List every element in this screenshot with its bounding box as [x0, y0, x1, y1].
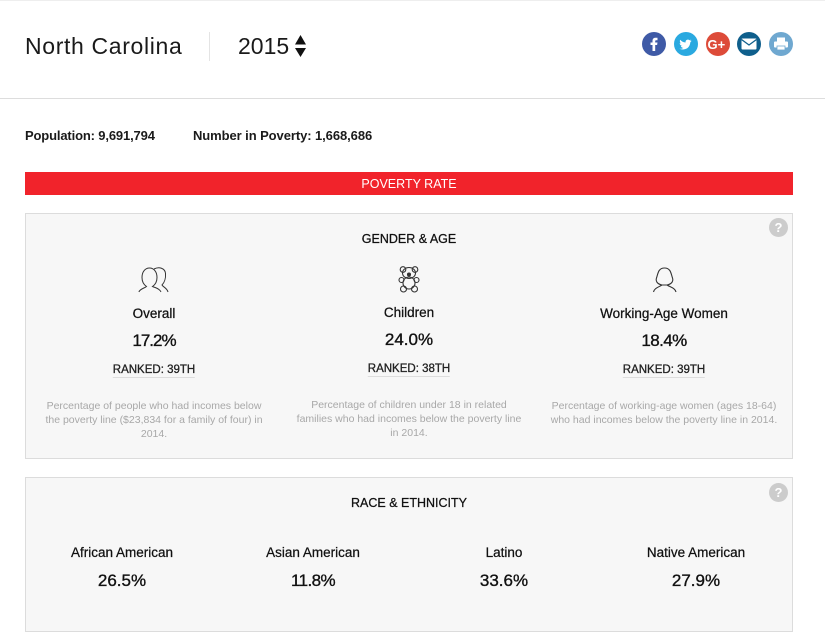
- icon: sort arrows: [295, 35, 306, 57]
- value: children: 24.0%: [385, 330, 433, 349]
- banner: poverty rate: [25, 172, 793, 195]
- icon: google plus: G+: [708, 37, 726, 52]
- icon: facebook: [642, 32, 666, 56]
- year: 2015: [238, 33, 289, 59]
- rank: children: RANKED: 38TH: [368, 363, 450, 375]
- description: children: [296, 399, 521, 439]
- description: overall: the poverty line ($23,834 for a family of four) in: [45, 414, 263, 426]
- description: working-age women: [550, 400, 777, 426]
- label: latino: Latino: [486, 545, 522, 560]
- description: overall: 2014.: [141, 428, 167, 440]
- description: overall: [45, 400, 263, 440]
- heading: RACE & ETHNICITY: [351, 496, 467, 510]
- label: asian american: Asian American: [266, 545, 360, 560]
- population: Population: 9,691,794: [25, 128, 155, 143]
- icon: help: [769, 483, 788, 502]
- label: native american: Native American: [647, 545, 745, 560]
- icon: help: ?: [775, 220, 782, 235]
- description: working-age women: Percentage of working-age women (ages 18-64): [552, 400, 776, 412]
- share icons: [642, 32, 793, 56]
- description: children: families who had incomes below the poverty line: [297, 413, 521, 425]
- value: african american: 26.5%: [98, 571, 146, 590]
- description: overall: Percentage of people who had incomes below: [47, 400, 261, 412]
- value: latino: 33.6%: [480, 571, 528, 590]
- value: native american: 27.9%: [672, 571, 720, 590]
- icon: two people: [138, 267, 168, 292]
- state name: North Carolina: [25, 33, 182, 59]
- rank: working-age women: RANKED: 39TH: [623, 364, 705, 376]
- icon: twitter: [674, 32, 698, 56]
- top rule: [0, 0, 825, 1]
- label: african american: African American: [71, 545, 173, 560]
- icon: help: [769, 218, 788, 237]
- icon: print: [769, 32, 793, 56]
- label: working-age women: Working-Age Women: [600, 306, 728, 321]
- description: working-age women: who had incomes below the poverty line in 2014.: [551, 414, 777, 426]
- icon: google plus: [706, 32, 730, 56]
- panel: race & ethnicity: [25, 477, 793, 632]
- year selector: [209, 32, 308, 61]
- value: overall: 17.2%: [132, 331, 176, 350]
- banner: poverty rate: POVERTY RATE: [361, 177, 457, 191]
- label: children: Children: [384, 305, 434, 320]
- value: working-age women: 18.4%: [641, 331, 687, 350]
- number in poverty: Number in Poverty: 1,668,686: [193, 128, 372, 143]
- header: [0, 1, 825, 99]
- panel: gender & age: [25, 213, 793, 459]
- description: children: Percentage of children under 18 in related: [311, 399, 507, 411]
- rank: overall: RANKED: 39TH: [113, 364, 195, 376]
- heading: GENDER & AGE: [362, 232, 456, 246]
- label: overall: Overall: [133, 306, 175, 321]
- icon: woman: [653, 268, 676, 292]
- icon: email: [737, 32, 761, 56]
- value: asian american: 11.8%: [291, 571, 335, 590]
- icon: help: ?: [775, 485, 782, 500]
- icon: teddy bear: [398, 266, 420, 292]
- description: children: in 2014.: [390, 427, 428, 439]
